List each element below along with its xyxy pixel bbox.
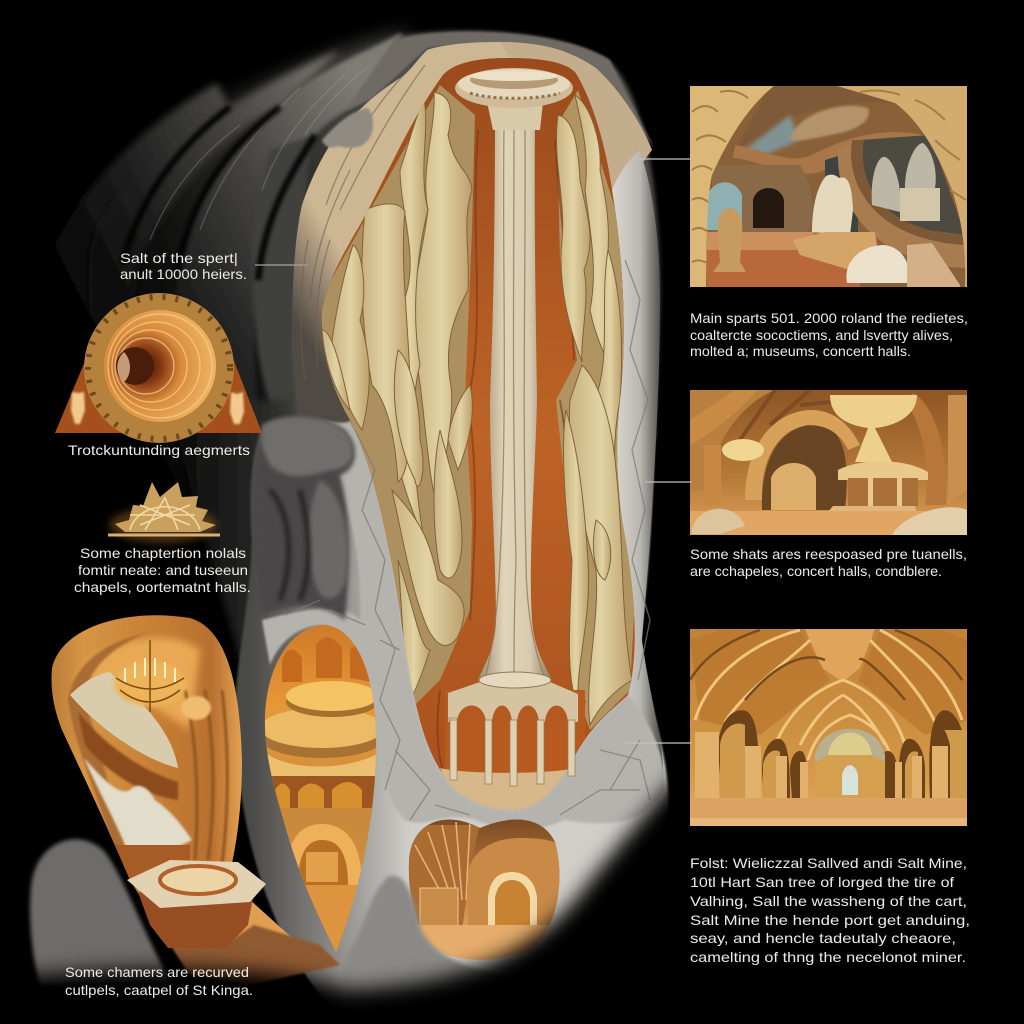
leader line: lower panel: [625, 742, 692, 744]
swoop band: [733, 132, 935, 174]
floor: [418, 925, 549, 960]
arcade pedestal: [448, 672, 578, 786]
tan rock band around the upper cavity: [292, 42, 650, 425]
rear tunnel: [762, 425, 847, 510]
icon: spiked salt dome: [108, 482, 220, 543]
dark base under the ridges: [54, 30, 410, 560]
leader line: upper panel: [636, 158, 690, 160]
text: lower panel caption: Valhing, Sall the wassheng of the cart,: [690, 893, 967, 909]
text: bottom-left caption: [65, 964, 253, 998]
blue sky patch: [745, 115, 800, 155]
text: middle panel caption: Some shats ares reespoased pre tuanells,: [690, 546, 967, 562]
balcony openings: [78, 712, 178, 800]
gold wall left: [720, 724, 780, 810]
text: lower panel caption: 10tl Hart San tree of lorged the tire of: [690, 874, 954, 890]
central door: [842, 765, 858, 795]
rock frame: [690, 86, 774, 287]
wall panels: [115, 845, 190, 880]
panel: vaulted hall scene: [690, 629, 967, 826]
white rock rim on the right: [590, 150, 663, 780]
third tier: [268, 754, 376, 780]
leader line: middle panel: [645, 481, 692, 483]
text: dome caption: [74, 545, 251, 595]
chamber ceiling glow: [75, 638, 200, 730]
text: upper panel caption: Main sparts 501. 2000 roland the redietes,: [690, 310, 968, 326]
window panes: [828, 732, 872, 755]
grey lumpy recess left of the rim: [254, 416, 355, 620]
big chandelier: [830, 395, 917, 462]
tan band right shoulder: [500, 42, 652, 205]
floor: [690, 798, 967, 826]
left column: [704, 445, 721, 505]
window wall: [815, 729, 885, 795]
pavilion: [815, 461, 928, 527]
drape shadow mass right: [556, 90, 640, 730]
frame lumps: [692, 91, 966, 264]
top grey ridge: [345, 32, 654, 148]
lower arcade: [272, 776, 375, 822]
bottom chamber: [408, 820, 560, 960]
drape shadow mass left: [320, 85, 475, 715]
vault sweep: [690, 390, 775, 490]
column fluting: [486, 130, 544, 675]
upper rock ceiling: [738, 86, 891, 146]
panel: upper right chamber scene: [690, 86, 967, 287]
grey rock lump on upper left: [322, 108, 373, 148]
carved altar: [127, 860, 266, 948]
small pavilion: [771, 463, 816, 510]
text: left label top: anult 10000 heiers.: [120, 266, 247, 282]
central ceiling panel: [805, 629, 875, 682]
gold lattice: [815, 755, 885, 800]
left grille: [420, 888, 458, 928]
tiered stages: [260, 681, 384, 758]
outer band shadow: [68, 632, 150, 860]
arches right: [880, 710, 967, 800]
chandelier: [114, 640, 186, 712]
tan band grain lines: [301, 65, 425, 380]
rear altar: [900, 188, 940, 221]
column capital disc: [455, 68, 573, 108]
text: bottom-left caption: cutlpels, caatpel of St Kinga.: [65, 982, 253, 998]
text: left label top: [120, 250, 247, 282]
small chandelier: [722, 439, 764, 461]
icon: tunnel rings cross-section: [55, 293, 262, 443]
leader line: left label: [255, 264, 307, 266]
dark recess: [825, 150, 858, 235]
statue base: [793, 232, 877, 270]
text: upper panel caption: coaltercte sococtiems, and lsvertty alives,: [690, 327, 953, 343]
column shaft: [478, 120, 552, 680]
middle chamber: [264, 625, 376, 952]
orange wood grain: [438, 130, 585, 780]
right pillars: [905, 393, 946, 505]
grey boulder in the centre bottom: [343, 876, 500, 1024]
big ring band: [838, 140, 965, 268]
rib: [740, 390, 850, 440]
small figures: [71, 392, 85, 424]
lower dark rock behind icons: [170, 400, 300, 660]
text: lower panel caption: [690, 855, 970, 965]
arches left: [718, 710, 808, 800]
floor: [440, 768, 567, 810]
bottom fade: [0, 760, 740, 1024]
shrine: [713, 208, 746, 272]
grey boulder lower left: [30, 839, 172, 985]
chamber floor: [305, 885, 358, 952]
text: left label top: Salt of the spert|: [120, 250, 238, 266]
cream fingers left: [322, 92, 472, 700]
blue opening: [707, 182, 742, 230]
rear statues: [872, 143, 936, 212]
arched door: [488, 872, 537, 925]
text: middle panel caption: [690, 546, 967, 579]
stairs: [907, 243, 960, 287]
door arch: [285, 824, 362, 885]
white salt cascade: [84, 758, 192, 852]
cream fingers right: [556, 95, 632, 725]
cavity orange backdrop: [322, 58, 635, 810]
curtain folds: [185, 690, 227, 865]
panel: chandelier hall scene: [690, 390, 967, 535]
text: lower panel caption: Folst: Wieliczzal Sallved andi Salt Mine,: [690, 855, 967, 871]
dark outer rock ridges on the left: [50, 33, 420, 460]
text: middle panel caption: are cchapeles, concert halls, condblere.: [690, 563, 942, 579]
text: upper panel caption: molted a; museums, concertt halls.: [690, 343, 911, 359]
lower orange arcade backdrop: [445, 690, 585, 780]
left chamber: [51, 615, 300, 945]
text: dome caption: chapels, oortematnt halls.: [74, 579, 251, 595]
foreground rocks: [692, 509, 745, 534]
upper arcade: [282, 637, 372, 682]
text: lower panel caption: seay, and hencle tadeutaly cheaore,: [690, 930, 956, 946]
front statues: [812, 175, 853, 235]
rock cracks: [285, 260, 650, 820]
text: dome caption: Some chaptertion nolals: [80, 545, 246, 561]
dark ribs: [690, 630, 962, 700]
inner hall: [468, 838, 560, 925]
text: dome caption: fomtir neate: and tuseeun: [78, 562, 248, 578]
floor under the altar: [170, 925, 340, 985]
text: lower panel caption: Salt Mine the hende port get anduing,: [690, 912, 970, 928]
column collar: [487, 102, 543, 130]
ceiling side shadows: [690, 630, 830, 735]
ring recess: [860, 135, 965, 235]
rock frame right: [837, 86, 967, 287]
floor: [690, 511, 967, 535]
rear wall: [712, 165, 813, 232]
text: bottom-left caption: Some chamers are recurved: [65, 964, 249, 980]
floor: [707, 232, 860, 287]
ceiling salt slab: [70, 672, 178, 768]
fan ribs: [408, 825, 480, 930]
columns: [695, 732, 948, 818]
main cavity with column: [320, 58, 640, 811]
text: tunnel caption: Trotckuntunding aegmerts: [68, 442, 250, 458]
ceiling ribs: [695, 630, 962, 760]
light rock rim on the lower left: [262, 420, 665, 830]
side sconce: [181, 696, 211, 720]
text: lower panel caption: camelting of thng the necelonot miner.: [690, 949, 966, 965]
gold wall right: [905, 728, 967, 810]
dark door: [753, 188, 784, 228]
lump cluster: [790, 106, 869, 141]
grey rock mass around the cavity: [235, 31, 668, 1024]
text: upper panel caption: [690, 310, 968, 359]
foreground boulders: [846, 245, 910, 283]
